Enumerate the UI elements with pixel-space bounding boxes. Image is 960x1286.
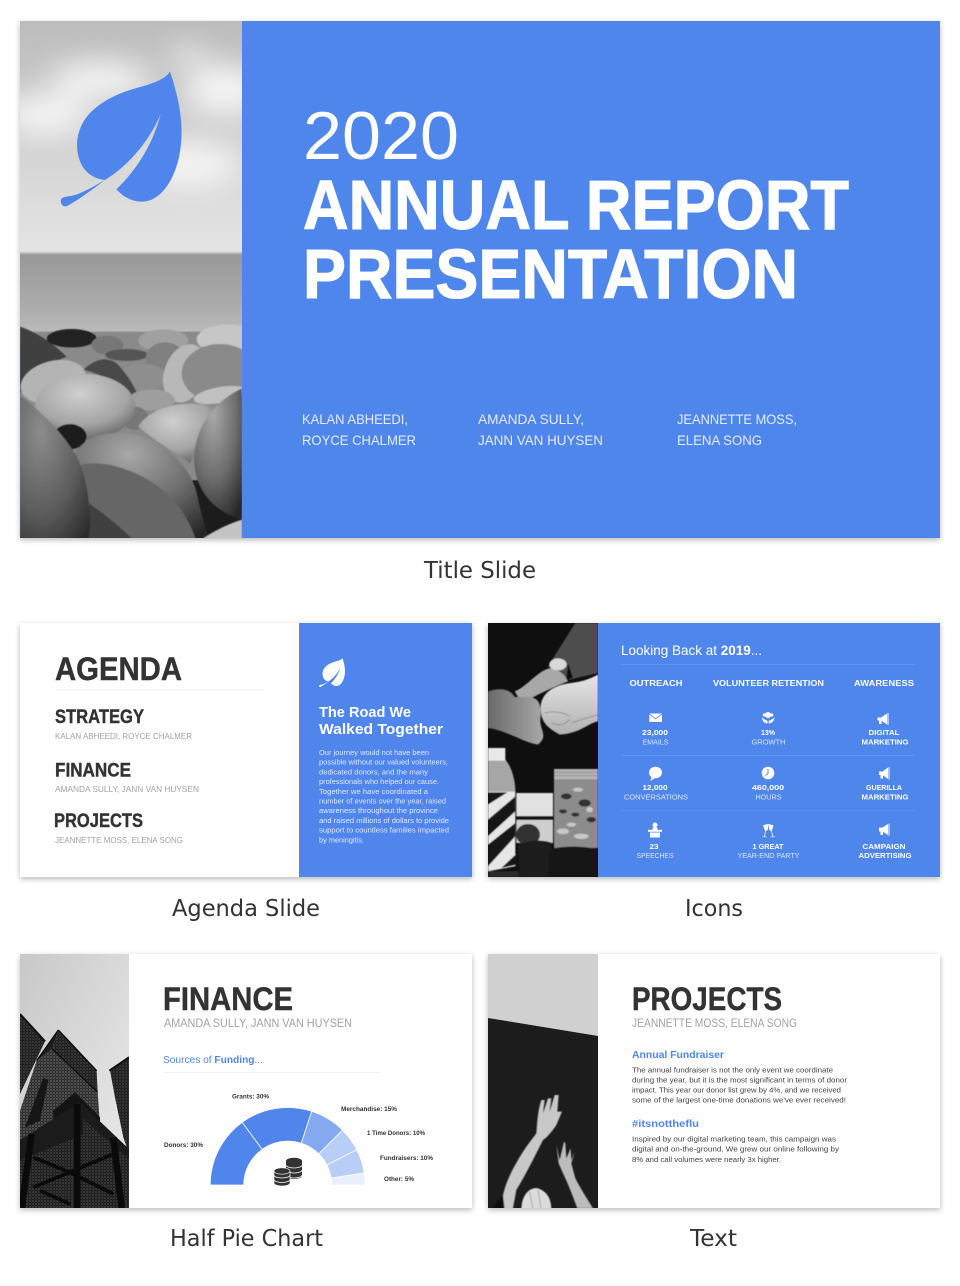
icon: podium speaker bbox=[648, 822, 662, 838]
authors: column 3: JEANNETTE MOSS, bbox=[677, 411, 797, 427]
agenda item: projects bbox=[54, 811, 183, 845]
icon: megaphone digital bbox=[878, 713, 888, 725]
heading: the road we walked together bbox=[319, 704, 443, 738]
chart labels: Grants: 30% bbox=[232, 1094, 270, 1100]
stat: digital marketing: MARKETING bbox=[862, 738, 909, 746]
subheading: finance authors: AMANDA SULLY, JANN VAN HUYSEN bbox=[164, 1016, 352, 1030]
icon: envelope bbox=[649, 714, 662, 722]
agenda item: strategy bbox=[55, 707, 192, 741]
chart labels: Donors: 30% bbox=[164, 1143, 204, 1149]
text block: journey paragraph: dedicated donors, and the many bbox=[319, 769, 429, 776]
stat: 23 speeches bbox=[636, 842, 674, 860]
stat: campaign advertising: ADVERTISING bbox=[858, 851, 912, 860]
agenda item: projects: JEANNETTE MOSS, ELENA SONG bbox=[55, 835, 183, 845]
text block: journey paragraph: by meningitis. bbox=[319, 837, 364, 844]
icon: coin stacks bbox=[274, 1158, 302, 1186]
icon: champagne glasses bbox=[762, 824, 775, 837]
stat: guerilla marketing: GUERILLA bbox=[866, 783, 903, 792]
heading: agenda: AGENDA bbox=[55, 651, 182, 687]
table header row: AWARENESS bbox=[854, 678, 914, 688]
text block: annual fundraiser: some of the largest one-time donations we've ever received! bbox=[632, 1098, 846, 1105]
half pie chart bbox=[164, 1094, 434, 1186]
stat: campaign advertising: CAMPAIGN bbox=[862, 842, 906, 851]
text block: annual fundraiser: during the year, but it is the most significant in terms of donor bbox=[632, 1078, 848, 1084]
text block: journey paragraph: professionals who helped our cause. bbox=[319, 779, 439, 786]
icon: clock bbox=[762, 767, 774, 779]
title text: 2020 bbox=[303, 98, 459, 174]
stat: 23 speeches: 23 bbox=[650, 842, 658, 851]
text block: annual fundraiser: Annual Fundraiser bbox=[632, 1050, 724, 1061]
stat: 13% growth: 13% bbox=[761, 728, 775, 737]
panel: agenda slide bbox=[20, 623, 472, 877]
authors: column 3: ELENA SONG bbox=[677, 432, 762, 448]
heading: the road we walked together: The Road We bbox=[319, 704, 411, 721]
stat: 12,000 conversations: 12,000 bbox=[642, 783, 668, 792]
table header row: VOLUNTEER RETENTION bbox=[713, 678, 824, 688]
title text bbox=[303, 98, 849, 313]
text block: itsnottheflu: Inspired by our digital marketing team, this campaign was bbox=[632, 1136, 837, 1144]
caption: title slide: Title Slide bbox=[423, 558, 536, 584]
stat: 23 speeches: SPEECHES bbox=[636, 851, 674, 860]
segment: grants bbox=[242, 1108, 312, 1149]
segment: fundraisers bbox=[327, 1150, 364, 1178]
segment: merchandise bbox=[301, 1111, 342, 1154]
text block: journey paragraph: and raised millions of dollars to provide bbox=[319, 818, 449, 825]
chart title: sources of funding: Sources of Funding... bbox=[163, 1055, 263, 1066]
text block: journey paragraph: awareness throughout the province bbox=[319, 808, 438, 815]
icon: growth flower bbox=[762, 712, 774, 724]
stat: 13% growth bbox=[752, 728, 786, 746]
chart labels: 1 Time Donors: 10% bbox=[367, 1131, 426, 1137]
heading: projects: PROJECTS bbox=[632, 981, 782, 1017]
panel: title slide bbox=[0, 21, 940, 540]
authors: column 1 bbox=[302, 411, 416, 448]
segment: one time donors bbox=[319, 1130, 357, 1165]
text block: annual fundraiser bbox=[632, 1050, 848, 1105]
agenda item: strategy: KALAN ABHEEDI, ROYCE CHALMER bbox=[55, 731, 192, 741]
stat: guerilla marketing: MARKETING bbox=[862, 792, 909, 802]
stat: 460,000 hours: 460,000 bbox=[752, 783, 784, 792]
text block: itsnottheflu: digital and on-the-ground. We grew our online following by bbox=[632, 1147, 840, 1154]
authors: column 2: JANN VAN HUYSEN bbox=[478, 432, 603, 448]
text block: annual fundraiser: The annual fundraiser is not the only event we coordinate bbox=[632, 1068, 833, 1074]
text block: annual fundraiser: impact. This year our donor list grew by 4%, and we received bbox=[632, 1088, 841, 1095]
title text: PRESENTATION bbox=[303, 235, 798, 313]
agenda item: finance: AMANDA SULLY, JANN VAN HUYSEN bbox=[55, 784, 199, 794]
stat: 1 great year-end party bbox=[738, 842, 800, 860]
chart labels: Fundraisers: 10% bbox=[380, 1156, 434, 1162]
stat: digital marketing: DIGITAL bbox=[868, 728, 900, 737]
text block: itsnottheflu: #itsnottheflu bbox=[632, 1119, 699, 1130]
authors: column 1: KALAN ABHEEDI, bbox=[302, 411, 408, 427]
table header row bbox=[630, 678, 914, 688]
photo: beach pebbles bbox=[20, 21, 242, 538]
stat: campaign advertising bbox=[858, 842, 912, 860]
heading: finance: FINANCE bbox=[163, 981, 293, 1017]
segment: other bbox=[331, 1173, 365, 1185]
icon: megaphone campaign bbox=[879, 824, 890, 836]
heading: looking back at 2019: Looking Back at 2019... bbox=[621, 642, 762, 658]
stat: 460,000 hours: HOURS bbox=[756, 792, 782, 802]
panel: finance slide bbox=[20, 954, 472, 1208]
chart labels: Other: 5% bbox=[384, 1177, 415, 1183]
stat: 1 great year-end party: YEAR-END PARTY bbox=[738, 851, 800, 860]
icon: white leaf bbox=[319, 658, 345, 687]
text block: journey paragraph: possible without our valued volunteers, bbox=[319, 760, 448, 767]
stat: guerilla marketing bbox=[862, 783, 909, 802]
stat: 1 great year-end party: 1 GREAT bbox=[752, 842, 784, 851]
caption: icons: Icons bbox=[685, 896, 743, 922]
photo: office towers bbox=[20, 954, 130, 1208]
caption: text: Text bbox=[689, 1226, 737, 1252]
caption: half pie chart: Half Pie Chart bbox=[170, 1226, 323, 1252]
heading: the road we walked together: Walked Together bbox=[319, 721, 443, 738]
stat: 12,000 conversations bbox=[624, 783, 688, 802]
text block: journey paragraph: Our journey would not have been bbox=[319, 750, 429, 757]
agenda item: finance bbox=[55, 760, 199, 794]
stat: 23,000 emails: 23,000 bbox=[642, 728, 668, 737]
authors: column 2: AMANDA SULLY, bbox=[478, 411, 584, 427]
agenda item: finance: FINANCE bbox=[55, 760, 131, 782]
stat: 460,000 hours bbox=[752, 783, 784, 802]
icon: blue leaf bbox=[61, 72, 182, 206]
segment: donors bbox=[210, 1122, 262, 1185]
stat: 13% growth: GROWTH bbox=[752, 738, 786, 746]
caption: agenda slide: Agenda Slide bbox=[172, 896, 320, 922]
authors: column 3 bbox=[677, 411, 797, 448]
panel: icons slide bbox=[488, 623, 940, 877]
table header row: OUTREACH bbox=[630, 678, 682, 688]
stat: 23,000 emails bbox=[642, 728, 669, 746]
stat: 23,000 emails: EMAILS bbox=[642, 738, 669, 746]
text block: journey paragraph: number of events over the year, raised bbox=[319, 798, 446, 806]
subheading: projects authors: JEANNETTE MOSS, ELENA SONG bbox=[632, 1016, 797, 1030]
text block: journey paragraph: support to countless families impacted bbox=[319, 828, 449, 835]
text block: journey paragraph: Together we have coordinated a bbox=[319, 789, 428, 796]
photo: raised hands bbox=[488, 954, 598, 1210]
agenda item: projects: PROJECTS bbox=[54, 811, 143, 832]
authors: column 1: ROYCE CHALMER bbox=[302, 432, 416, 448]
text block: journey paragraph bbox=[319, 750, 449, 844]
stat: digital marketing bbox=[862, 728, 909, 746]
title text: ANNUAL REPORT bbox=[303, 166, 849, 244]
agenda item: strategy: STRATEGY bbox=[55, 707, 144, 728]
text block: itsnottheflu bbox=[632, 1119, 840, 1164]
chart labels: Merchandise: 15% bbox=[341, 1107, 398, 1113]
text block: itsnottheflu: 8% and call volumes were nearly 3x higher. bbox=[632, 1157, 781, 1164]
panel: projects slide bbox=[488, 954, 940, 1210]
stat: 12,000 conversations: CONVERSATIONS bbox=[624, 792, 688, 802]
icon: megaphone guerilla bbox=[879, 767, 890, 780]
chart labels bbox=[164, 1094, 434, 1183]
icon: speech bubble bbox=[649, 767, 662, 781]
authors: column 2 bbox=[478, 411, 603, 448]
photo: fist bump bbox=[488, 623, 598, 877]
